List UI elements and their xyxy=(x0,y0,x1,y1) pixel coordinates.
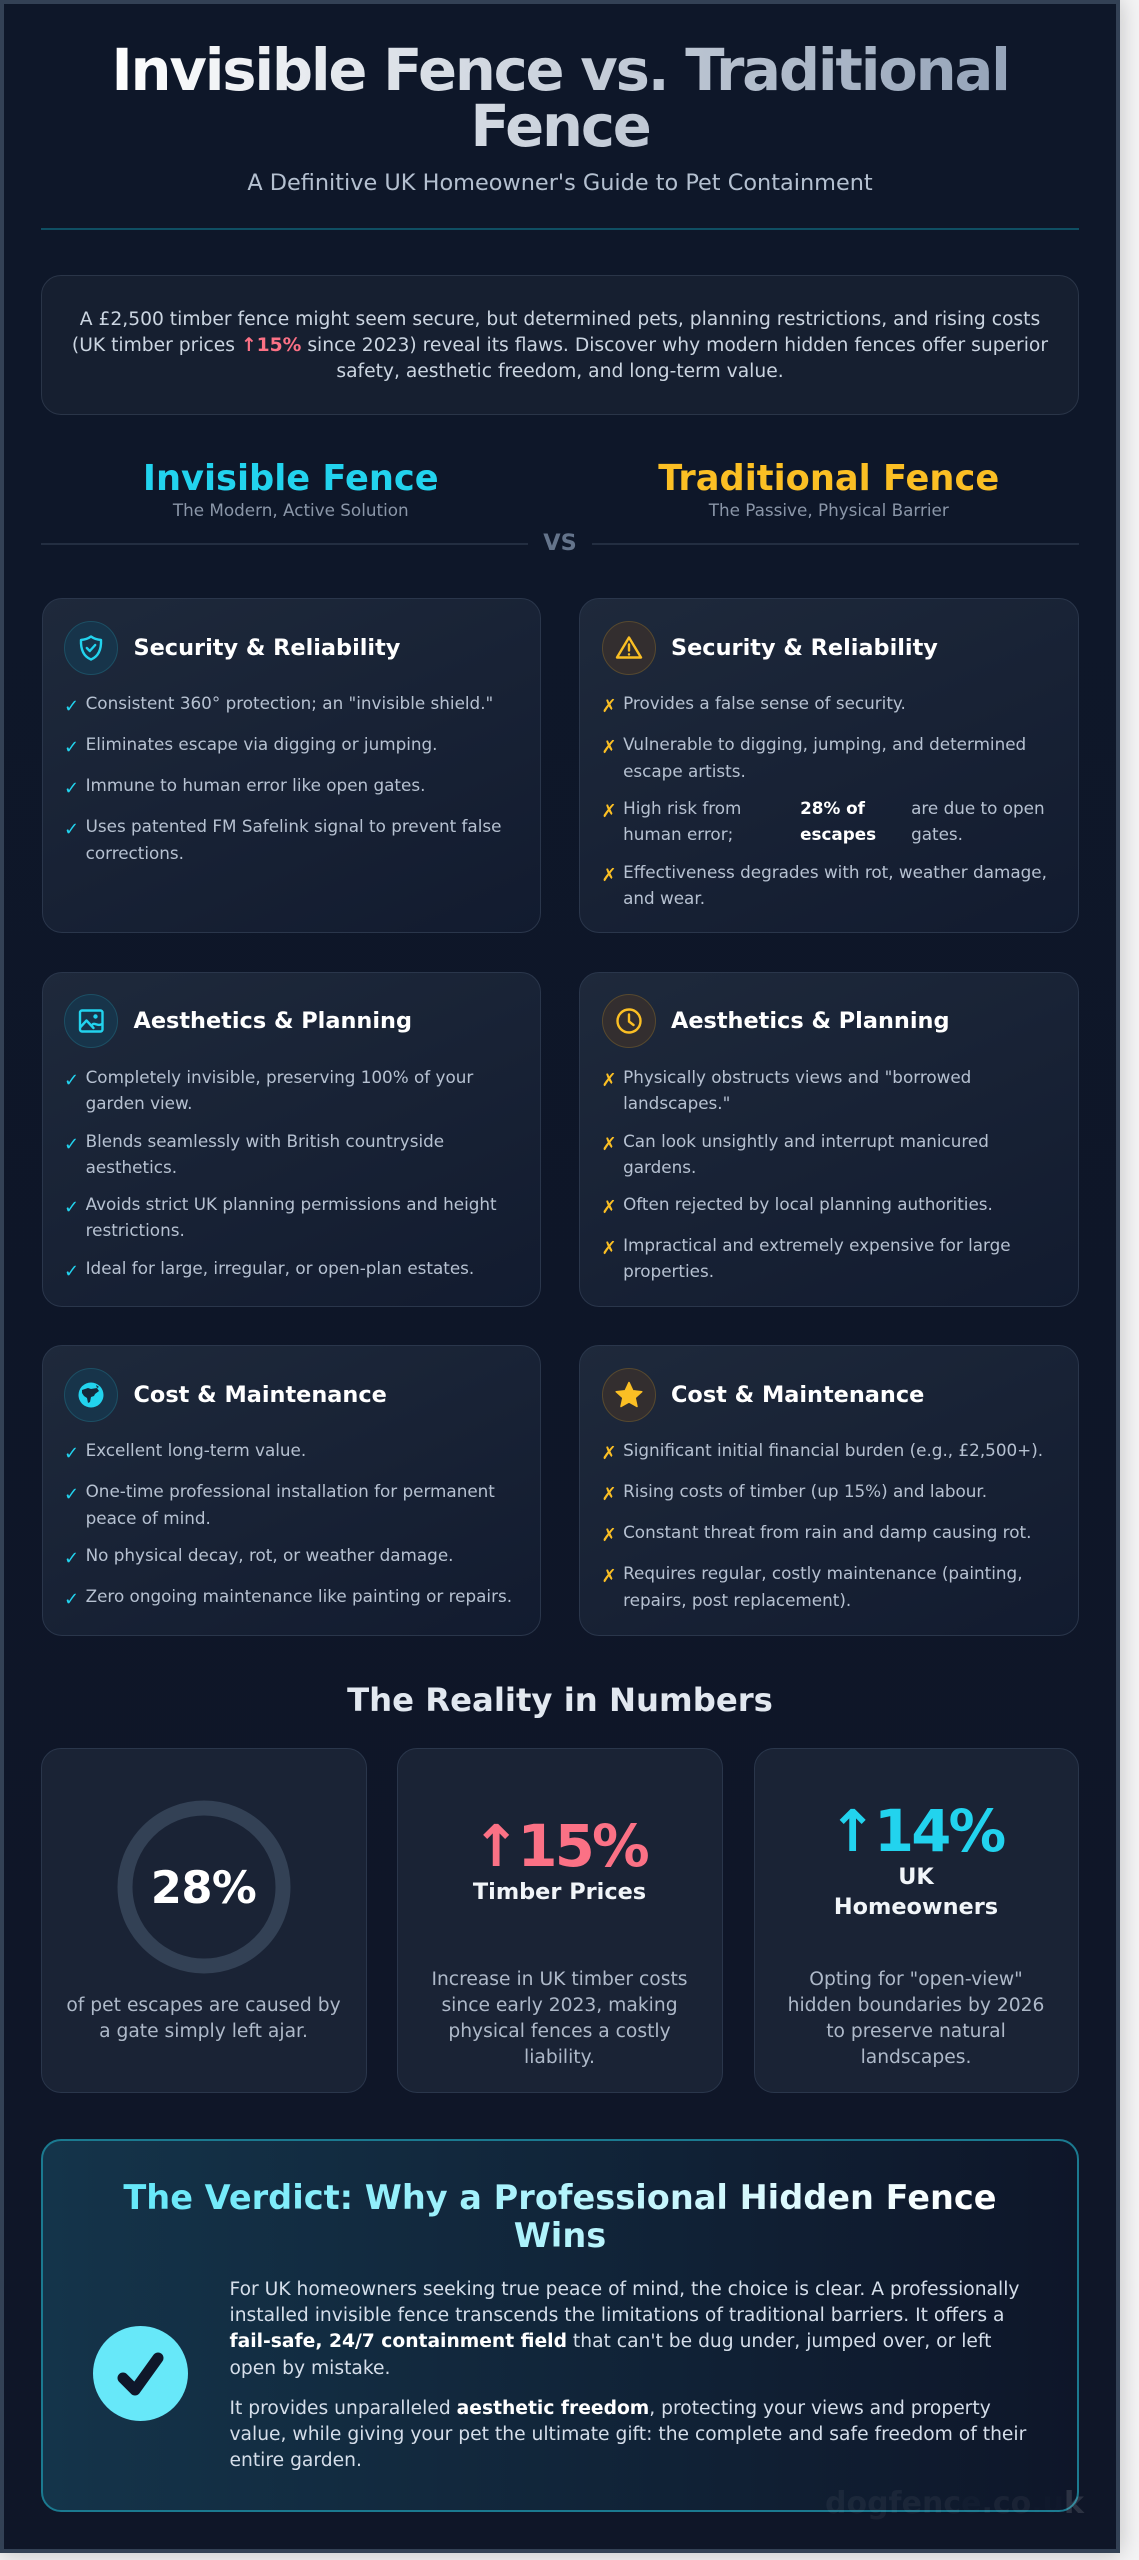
list: landscapes." xyxy=(623,1093,730,1113)
heading: the reality in numbers: The Reality in Numbers xyxy=(347,1681,773,1719)
list: Immune to human error like open gates. xyxy=(86,775,425,795)
subheading: traditional fence: The Passive, Physical Barrier xyxy=(709,500,949,520)
list: ✓ xyxy=(64,1484,79,1505)
title: Invisible Fence vs. Traditional xyxy=(111,36,1009,104)
list: ✓ xyxy=(64,778,79,799)
stat description: hidden boundaries by 2026 xyxy=(788,1995,1044,2016)
watermark: dogfence.co.uk xyxy=(825,2486,1084,2521)
list: Avoids strict UK planning permissions and height xyxy=(86,1194,497,1214)
list: Often rejected by local planning authorities. xyxy=(623,1194,993,1214)
list: ✓ xyxy=(64,1261,79,1282)
list: ✗ xyxy=(602,1238,617,1259)
list: ✗ xyxy=(602,696,617,717)
stat label: Homeowners xyxy=(834,1894,998,1920)
list: escapes xyxy=(800,824,876,844)
subtitle: A Definitive UK Homeowner's Guide to Pet Containment xyxy=(247,170,873,196)
panel: invisible cost xyxy=(42,1345,541,1636)
title: Fence xyxy=(470,92,650,160)
list: Rising costs of timber (up 15%) and labour. xyxy=(623,1481,987,1501)
ring chart xyxy=(118,1800,290,1974)
list: Impractical and extremely expensive for large xyxy=(623,1235,1011,1255)
intro text: A £2,500 timber fence might seem secure, but determined pets, planning restrictions, and rising costs xyxy=(80,309,1040,330)
list: gates. xyxy=(911,824,963,844)
list: gardens. xyxy=(623,1157,696,1177)
stat description: Increase in UK timber costs xyxy=(431,1968,688,1990)
title xyxy=(41,42,1079,154)
list: ✓ xyxy=(64,819,79,840)
heading: invisible fence: Invisible Fence xyxy=(143,458,439,498)
verdict title xyxy=(41,2179,1079,2255)
intro text: (UK timber prices ↑15% since 2023) reveal its flaws. Discover why modern hidden fences offer superior xyxy=(72,335,1048,356)
stat description xyxy=(66,1994,341,2042)
stat value: ↑15% xyxy=(472,1812,647,1880)
stat label: UK xyxy=(898,1864,934,1890)
list: Zero ongoing maintenance like painting or repairs. xyxy=(86,1586,512,1606)
vs label: VS xyxy=(543,530,577,556)
list: ✗ xyxy=(602,1197,617,1218)
list: ✓ xyxy=(64,1197,79,1218)
verdict paragraph two: entire garden. xyxy=(230,2450,362,2471)
list: ✓ xyxy=(64,1070,79,1091)
list: Excellent long-term value. xyxy=(86,1440,306,1460)
verdict paragraph two xyxy=(230,2398,1026,2471)
list: Effectiveness degrades with rot, weather damage, xyxy=(623,862,1047,882)
list xyxy=(602,693,1047,908)
list: Blends seamlessly with British countryside xyxy=(86,1131,444,1151)
stat description: Opting for "open-view" xyxy=(809,1968,1023,1990)
list: No physical decay, rot, or weather damage. xyxy=(86,1545,454,1565)
heading: Cost & Maintenance xyxy=(671,1382,924,1408)
list: escape artists. xyxy=(623,761,746,781)
list: repairs, post replacement). xyxy=(623,1590,851,1610)
list xyxy=(602,1440,1043,1610)
stat description xyxy=(788,1968,1044,2068)
list xyxy=(64,1440,512,1610)
stat description: liability. xyxy=(524,2047,595,2068)
list: peace of mind. xyxy=(86,1508,211,1528)
verdict paragraph one: For UK homeowners seeking true peace of mind, the choice is clear. A professionally xyxy=(230,2279,1019,2300)
list: ✓ xyxy=(64,1134,79,1155)
heading: Cost & Maintenance xyxy=(134,1382,387,1408)
panel: invisible aesthetics xyxy=(42,972,541,1307)
list: ✗ xyxy=(602,1484,617,1505)
verdict title: The Verdict: Why a Professional Hidden Fence xyxy=(123,2178,997,2217)
stat label xyxy=(834,1864,998,1920)
stat value: 28% xyxy=(151,1861,256,1914)
list: properties. xyxy=(623,1261,714,1281)
icon: star xyxy=(602,1368,656,1422)
list: Constant threat from rain and damp causing rot. xyxy=(623,1522,1031,1542)
icon: shield xyxy=(64,620,118,674)
list: ✗ xyxy=(602,1134,617,1155)
heading: Aesthetics & Planning xyxy=(134,1008,412,1034)
panel: stat 15% xyxy=(397,1748,723,2093)
panel: stat 28% xyxy=(41,1748,367,2093)
list: Eliminates escape via digging or jumping. xyxy=(86,734,438,754)
list: corrections. xyxy=(86,842,184,862)
list: Provides a false sense of security. xyxy=(623,693,906,713)
list: Consistent 360° protection; an "invisible shield." xyxy=(86,693,493,713)
intro text xyxy=(72,309,1048,382)
stat description: a gate simply left ajar. xyxy=(99,2021,308,2042)
stat description xyxy=(431,1968,688,2068)
icon: clock xyxy=(602,994,656,1048)
list: Can look unsightly and interrupt manicured xyxy=(623,1131,989,1151)
list: ✓ xyxy=(64,737,79,758)
stat label: Timber Prices xyxy=(473,1878,646,1904)
list xyxy=(602,1067,1011,1281)
list: human error; xyxy=(623,824,733,844)
list: are due to open xyxy=(911,798,1045,818)
list: ✓ xyxy=(64,1589,79,1610)
list: Requires regular, costly maintenance (painting, xyxy=(623,1563,1023,1583)
panel: traditional aesthetics xyxy=(579,972,1079,1307)
heading: traditional fence: Traditional Fence xyxy=(658,458,999,498)
list: garden view. xyxy=(86,1093,193,1113)
list: ✗ xyxy=(602,737,617,758)
verdict paragraph one: installed invisible fence transcends the limitations of traditional barriers. It offers a xyxy=(230,2305,1004,2326)
list: ✗ xyxy=(602,1525,617,1546)
list: Significant initial financial burden (e.g., £2,500+). xyxy=(623,1440,1043,1460)
icon: check circle xyxy=(93,2326,188,2421)
panel: traditional cost xyxy=(579,1345,1079,1636)
verdict paragraph one: open by mistake. xyxy=(230,2358,390,2379)
subheading: invisible fence: The Modern, Active Solution xyxy=(173,500,409,520)
verdict paragraph two: value, while giving your pet the ultimate gift: the complete and safe freedom of their xyxy=(230,2424,1026,2445)
stat description: landscapes. xyxy=(861,2047,971,2068)
heading: Security & Reliability xyxy=(671,635,938,661)
list: Uses patented FM Safelink signal to prevent false xyxy=(86,816,501,836)
icon: image xyxy=(64,994,118,1048)
intro text: safety, aesthetic freedom, and long-term value. xyxy=(336,361,784,382)
verdict paragraph one: fail-safe, 24/7 containment field that can't be dug under, jumped over, or left xyxy=(230,2331,991,2352)
list: ✓ xyxy=(64,696,79,717)
stat description: to preserve natural xyxy=(826,2021,1006,2042)
list: ✗ xyxy=(602,865,617,886)
list: ✓ xyxy=(64,1548,79,1569)
heading: Security & Reliability xyxy=(134,635,400,661)
list xyxy=(64,1067,497,1282)
icon: globe xyxy=(64,1368,118,1422)
list: One-time professional installation for permanent xyxy=(86,1481,495,1501)
list: Vulnerable to digging, jumping, and determined xyxy=(623,734,1026,754)
stat value: ↑14% xyxy=(829,1798,1003,1864)
verdict paragraph two: It provides unparalleled aesthetic freedom, protecting your views and property xyxy=(230,2398,991,2419)
list: Completely invisible, preserving 100% of your xyxy=(86,1067,473,1087)
list xyxy=(64,693,501,862)
panel: traditional security xyxy=(579,598,1079,933)
stat description: since early 2023, making xyxy=(441,1995,678,2016)
panel: intro xyxy=(41,274,1079,414)
list: ✗ xyxy=(602,1070,617,1091)
heading: Aesthetics & Planning xyxy=(671,1008,949,1034)
stat description: physical fences a costly xyxy=(448,2021,671,2042)
list: ✗ xyxy=(602,801,617,822)
list: restrictions. xyxy=(86,1220,185,1240)
list: ✗ xyxy=(602,1443,617,1464)
list: High risk from xyxy=(623,798,741,818)
panel: invisible security xyxy=(42,598,541,933)
list: ✓ xyxy=(64,1443,79,1464)
panel: stat 14% xyxy=(754,1748,1079,2093)
list: Ideal for large, irregular, or open-plan estates. xyxy=(86,1258,474,1278)
icon: warning xyxy=(602,620,656,674)
list: aesthetics. xyxy=(86,1157,177,1177)
list: ✗ xyxy=(602,1566,617,1587)
stat description: of pet escapes are caused by xyxy=(66,1994,341,2016)
list: 28% of xyxy=(800,798,865,818)
list: and wear. xyxy=(623,888,705,908)
verdict title: Wins xyxy=(514,2216,606,2255)
list: Physically obstructs views and "borrowed xyxy=(623,1067,971,1087)
verdict paragraph one xyxy=(230,2279,1019,2379)
panel: verdict xyxy=(41,2139,1079,2512)
